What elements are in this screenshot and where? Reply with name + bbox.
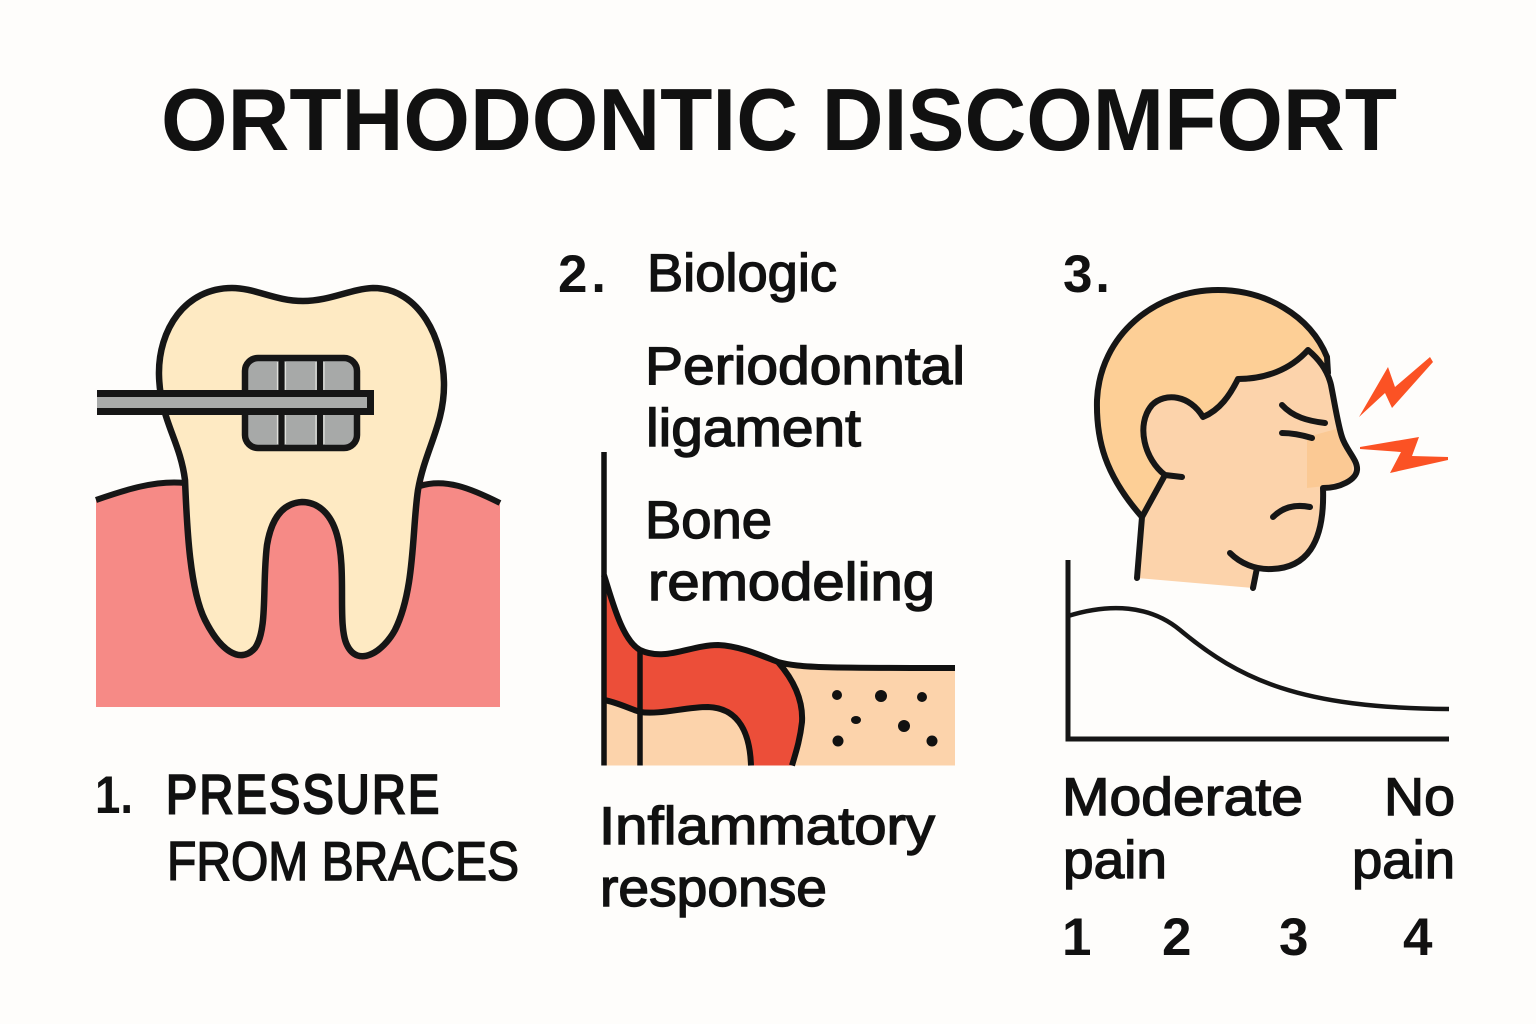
panel: pressure from braces: [86, 288, 519, 892]
label: no pain: pain: [1352, 831, 1455, 890]
icon: bracket: [86, 358, 370, 448]
panel: pain over time: [1062, 245, 1455, 967]
bone pores: [832, 690, 938, 746]
label: no pain: [1352, 768, 1455, 890]
label: inflammatory response: Inflammatory: [599, 797, 936, 856]
axis numbers: 3: [1279, 908, 1308, 967]
gum: [96, 481, 500, 707]
label: periodontal ligament: ligament: [646, 399, 861, 458]
panel: biologic: [558, 244, 965, 918]
label: moderate pain: pain: [1063, 831, 1167, 890]
icon: face in pain: [1097, 290, 1357, 588]
axis numbers: 2: [1162, 908, 1191, 967]
label: bone remodeling: Bone: [645, 491, 772, 550]
diagram: tissue cross-section: [604, 452, 955, 766]
heading 3: 3.: [1063, 245, 1110, 304]
label 1: [95, 763, 519, 892]
chart: pain curve: [1068, 560, 1449, 739]
label: bone remodeling: [645, 491, 935, 612]
label: inflammatory response: [599, 797, 936, 918]
label: inflammatory response: response: [600, 859, 827, 918]
axis numbers: 4: [1403, 908, 1433, 967]
axis numbers: [1062, 908, 1433, 967]
heading 2: 2.: [558, 245, 606, 304]
label 1: 1.: [95, 766, 133, 825]
heading 2: [558, 244, 837, 304]
label: no pain: No: [1384, 768, 1455, 827]
heading 2: Biologic: [647, 244, 837, 303]
label 1: PRESSURE: [166, 763, 442, 825]
label: moderate pain: [1062, 768, 1303, 890]
label 1: FROM BRACES: [167, 830, 519, 892]
label: periodontal ligament: [645, 337, 965, 458]
axis numbers: 1: [1062, 908, 1091, 967]
title: ORTHODONTIC DISCOMFORT: [161, 70, 1397, 169]
icon: pain bolts: [1359, 357, 1448, 473]
label: bone remodeling: remodeling: [648, 553, 935, 612]
label: periodontal ligament: Periodonntal: [645, 337, 965, 396]
label: moderate pain: Moderate: [1062, 768, 1303, 827]
icon: tooth: [159, 288, 444, 656]
